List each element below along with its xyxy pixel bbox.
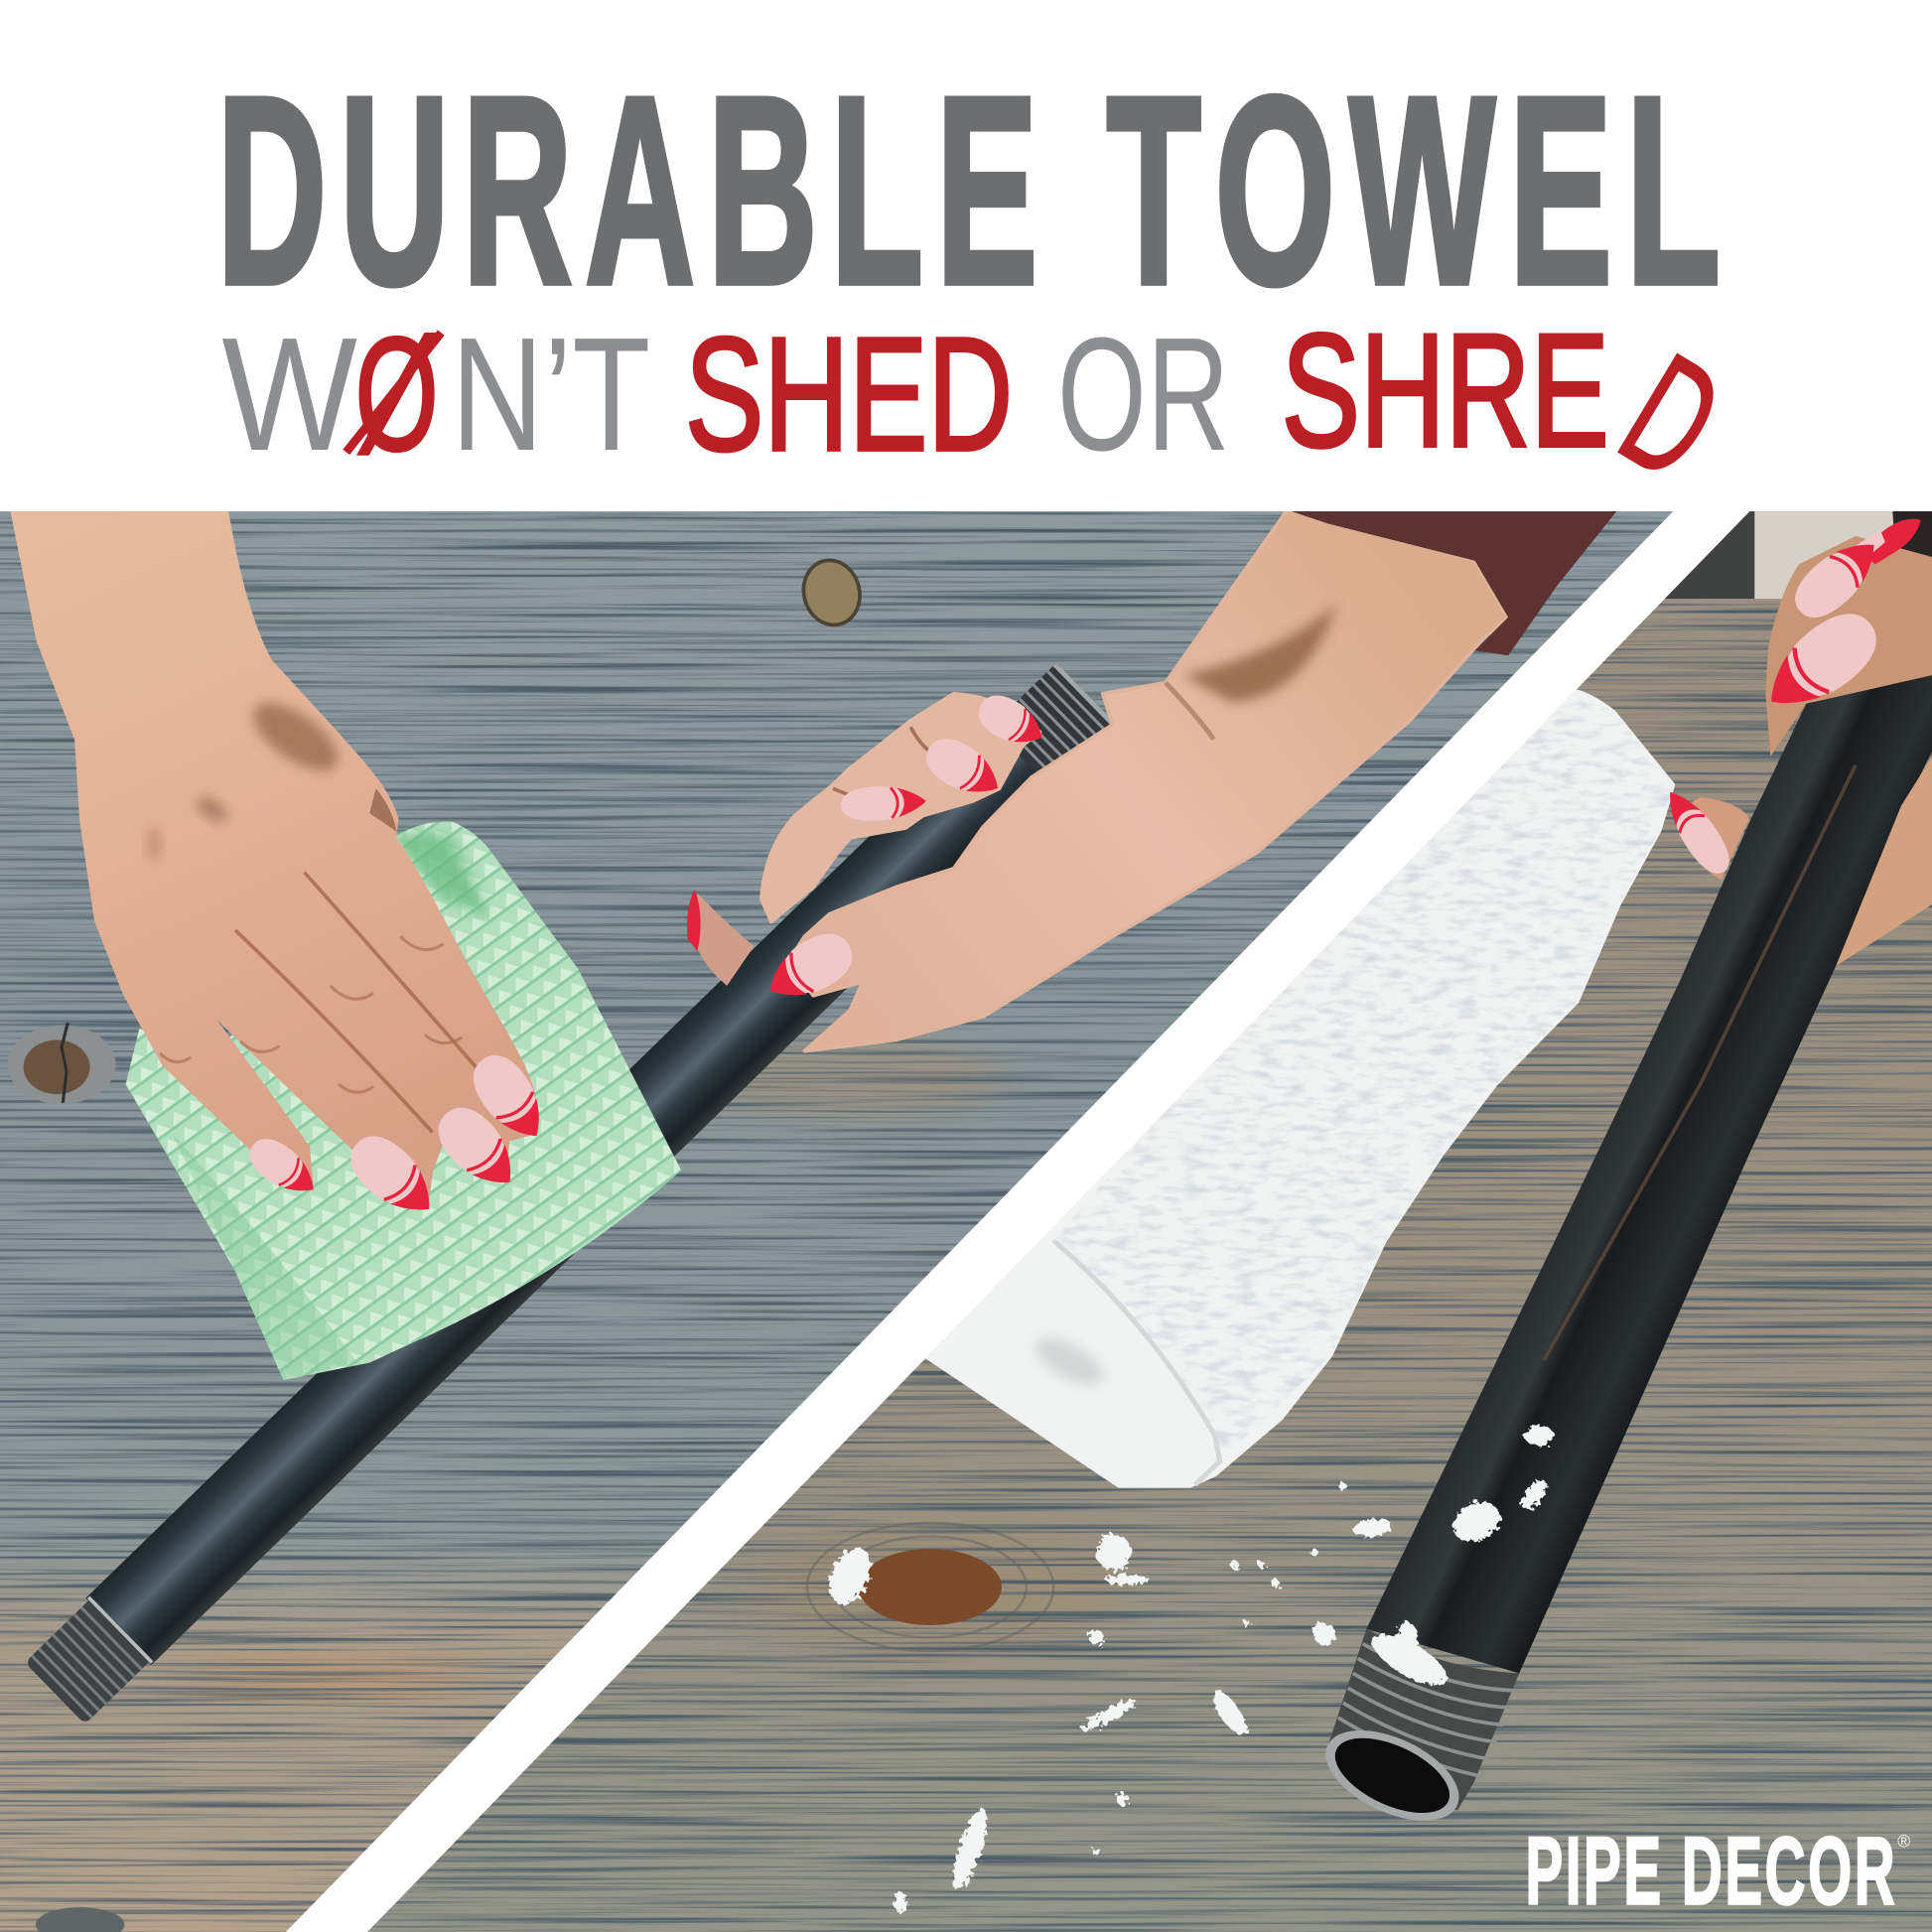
logo: PIPE DECOR	[1525, 1817, 1897, 1924]
white terry towel	[924, 665, 1688, 1486]
steel pipe	[1311, 511, 1932, 1840]
diagonal white divider	[286, 511, 1749, 1932]
wood knots	[7, 552, 869, 1932]
green waffle towel	[126, 822, 681, 1380]
panel: durable green towel photo	[0, 511, 1725, 1932]
wiping hand	[12, 511, 557, 1228]
lint flakes	[821, 1426, 1554, 1913]
subtitle: OR	[1057, 305, 1230, 484]
title: DURABLE	[216, 43, 1050, 341]
subtitle	[221, 301, 1749, 515]
subtitle: SHED	[685, 305, 1013, 484]
steel pipe	[22, 658, 1118, 1727]
logo	[1529, 1835, 1910, 1906]
gripping hand	[687, 511, 1508, 1051]
holding hand	[1656, 519, 1932, 966]
subtitle: Ø	[354, 305, 439, 484]
title	[216, 41, 1734, 341]
title: TOWEL	[1106, 41, 1734, 340]
subtitle: SHRE	[1282, 301, 1609, 481]
logo: ®	[1897, 1831, 1910, 1851]
wood knot	[807, 1523, 1053, 1651]
subtitle: W	[221, 305, 357, 484]
maroon sleeve cuff	[1292, 511, 1616, 655]
subtitle: D	[1593, 321, 1749, 515]
header background	[0, 0, 1932, 511]
subtitle: N’T	[451, 305, 650, 484]
panel: shedding white towel photo	[367, 511, 1932, 1932]
background wall	[1664, 511, 1894, 600]
